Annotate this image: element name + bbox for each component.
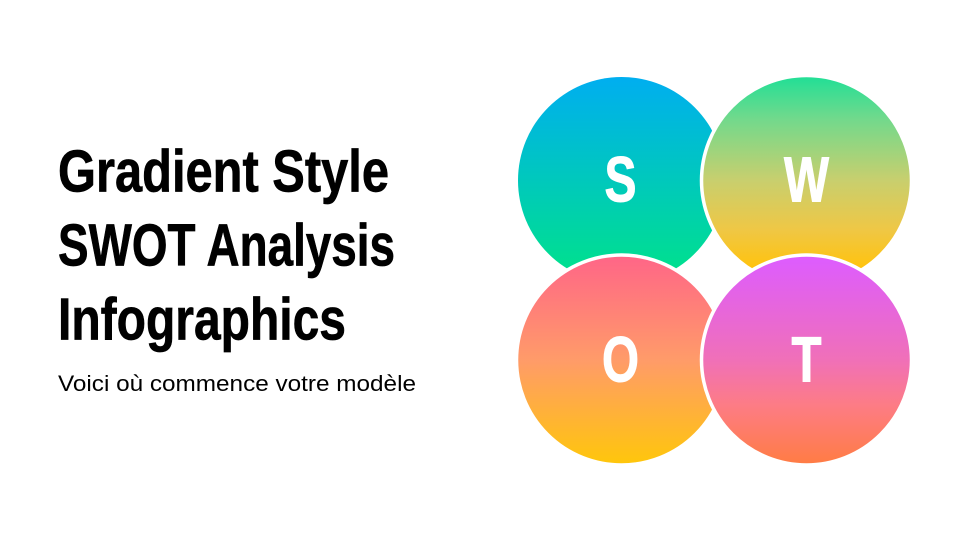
circle: O opportunities: O (602, 324, 639, 396)
title: SWOT Analysis (58, 212, 395, 278)
circle: W weaknesses (702, 76, 912, 286)
circle: T threats: T (792, 324, 822, 396)
circle: W weaknesses: W (784, 144, 829, 216)
circle: S strengths: S (604, 144, 636, 216)
title: Gradient Style (58, 138, 389, 204)
circle: T threats (702, 255, 912, 465)
title: Infographics (58, 286, 346, 352)
circle: S strengths (518, 77, 725, 284)
subtitle: Voici où commence votre modèle (58, 371, 416, 396)
SWOT diagram (516, 76, 912, 465)
title (58, 138, 395, 352)
circle: O opportunities (516, 255, 726, 465)
